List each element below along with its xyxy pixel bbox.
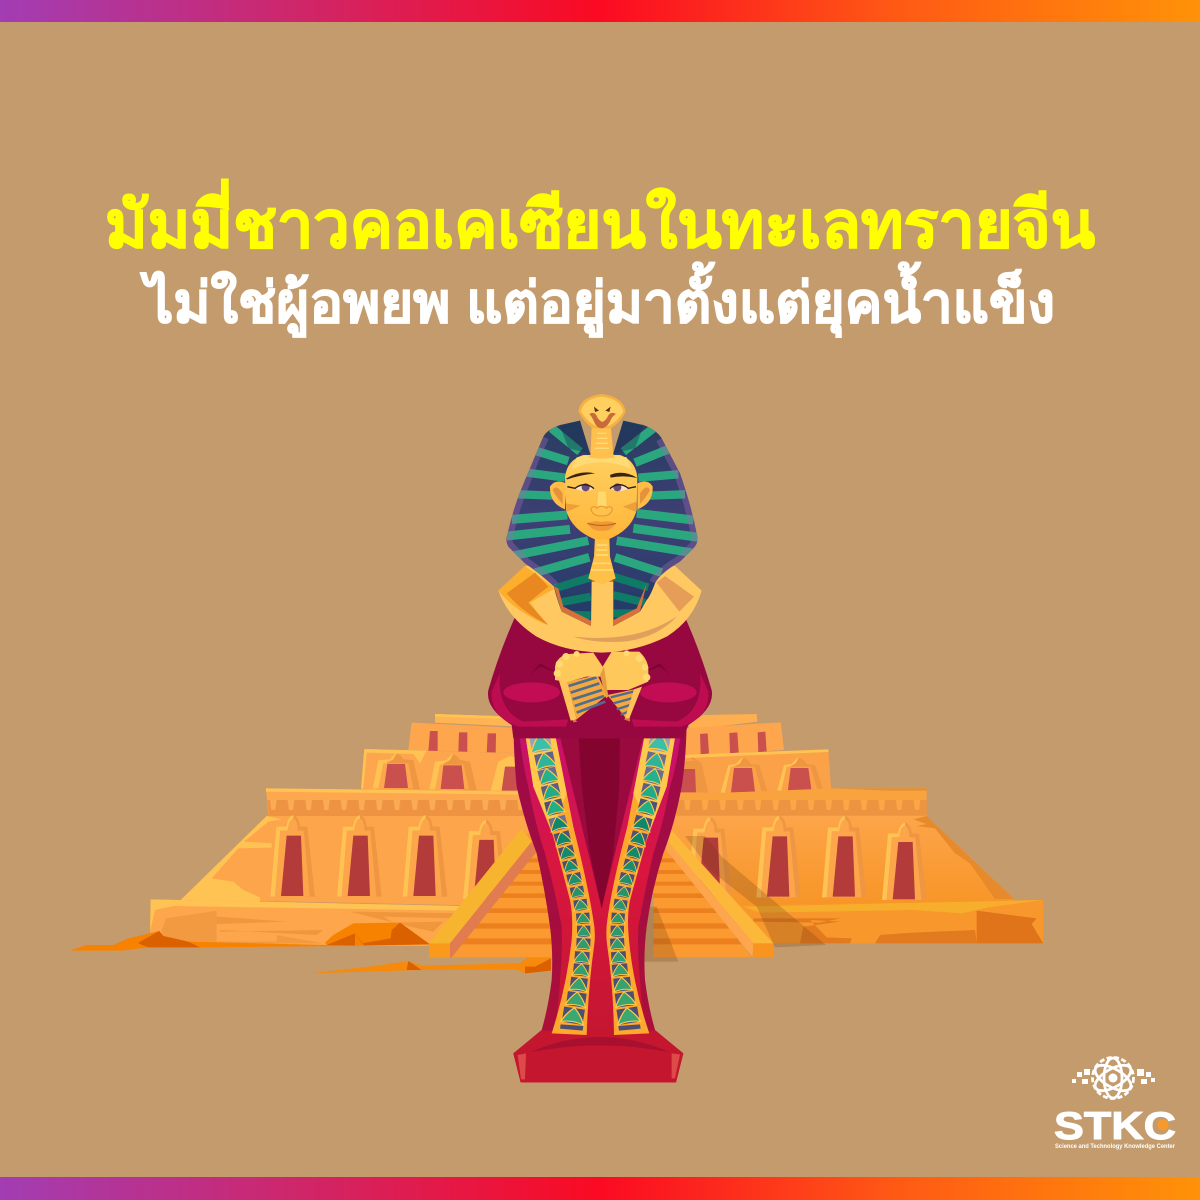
right inlay strip bbox=[606, 732, 676, 1035]
lips bbox=[587, 521, 616, 531]
base bbox=[513, 1031, 683, 1082]
robe shoulders bbox=[488, 613, 712, 738]
stairs: left half bbox=[427, 828, 560, 960]
STKC logo bbox=[1054, 1058, 1176, 1150]
logo pixel squares bbox=[1072, 1069, 1155, 1084]
nose bbox=[597, 492, 607, 506]
top gradient bar bbox=[0, 0, 1200, 22]
face bbox=[565, 455, 637, 539]
collar bbox=[498, 566, 702, 653]
ears bbox=[550, 481, 566, 509]
title bbox=[105, 179, 1095, 338]
brows bbox=[566, 472, 637, 479]
centre panel bbox=[558, 730, 645, 908]
right mosaic tiles bbox=[609, 732, 672, 1031]
logo wordmark: STKC bbox=[1054, 1105, 1176, 1148]
sand and rocks: left bbox=[70, 923, 551, 973]
title: ไม่ใช่ผู้อพยพ แต่อยู่มาตั้งแต่ยุคน้ำแข็ง bbox=[140, 262, 1055, 338]
bottom gradient bar bbox=[0, 1177, 1200, 1200]
neck shadow bbox=[588, 540, 616, 582]
headdress stripes bbox=[506, 428, 698, 615]
sarcophagus legs and base bbox=[513, 723, 687, 1082]
wrist wraps bbox=[567, 675, 607, 719]
left mosaic tiles bbox=[528, 733, 591, 1031]
nemes headdress bbox=[506, 421, 697, 626]
temple: right side bbox=[670, 714, 1043, 943]
cobra uraeus bbox=[588, 425, 615, 459]
mummy cast shadow bbox=[643, 836, 826, 962]
logo atom icon bbox=[1091, 1058, 1135, 1098]
eyes bbox=[575, 485, 628, 491]
left inlay strip bbox=[525, 733, 595, 1035]
temple: left side bbox=[150, 714, 533, 946]
grand staircase bbox=[427, 828, 826, 962]
logo orange dot bbox=[1158, 1120, 1168, 1130]
stairs: right half bbox=[643, 828, 826, 962]
false beard bbox=[588, 537, 616, 585]
mummy upper body bbox=[488, 394, 712, 738]
mummy sarcophagus bbox=[488, 394, 712, 1082]
title: มัมมี่ชาวคอเคเซียนในทะเลทรายจีน bbox=[105, 179, 1095, 261]
logo subtitle: Science and Technology Knowledge Center bbox=[1055, 1143, 1175, 1150]
crossed hands bbox=[555, 652, 648, 690]
